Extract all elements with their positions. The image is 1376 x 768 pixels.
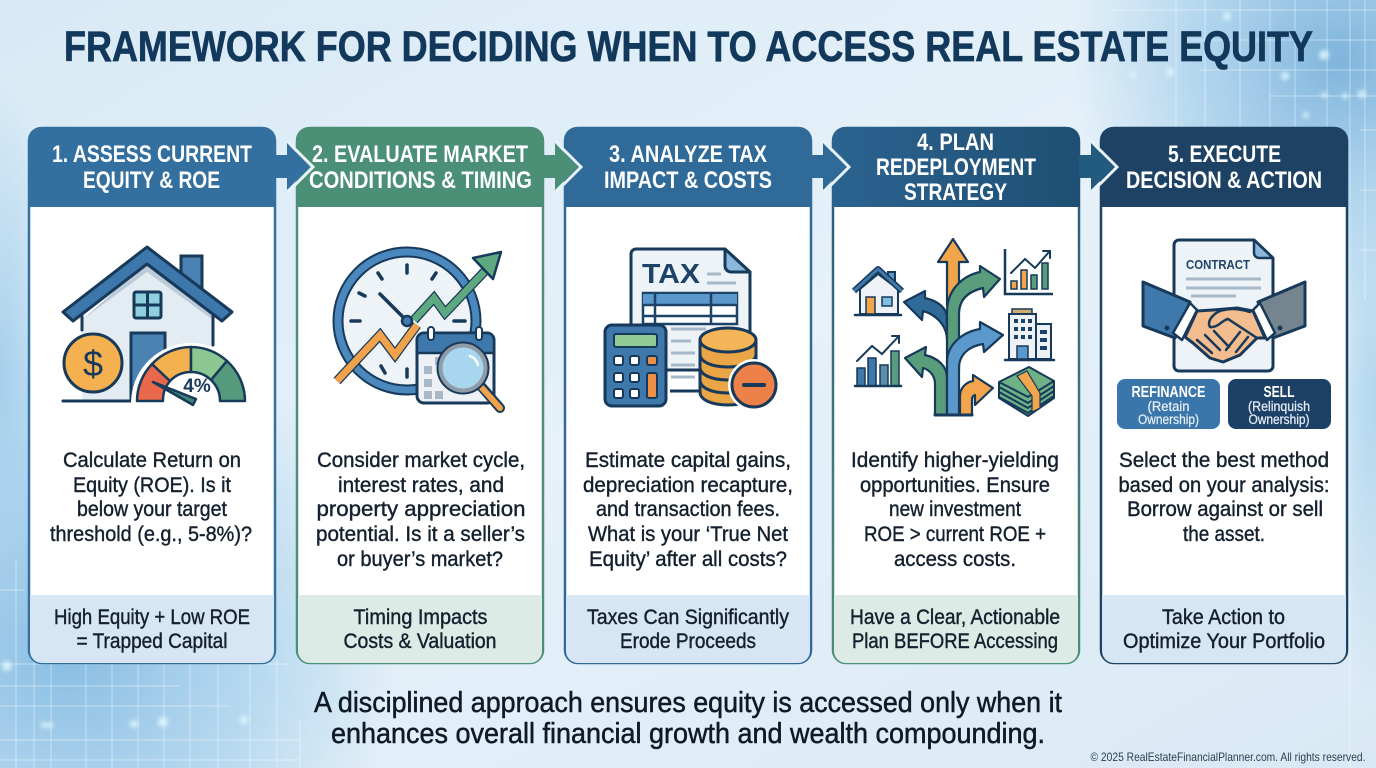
callout: step 5 takeaway: Optimize Your Portfolio (1123, 630, 1325, 653)
text: step 5 description (1118, 448, 1330, 546)
button: refinance: REFINANCE (1132, 384, 1206, 401)
heading: step 5 (1126, 141, 1322, 194)
text: step 5 description: based on your analysis: (1118, 473, 1330, 497)
icon: tax form, calculator, coins: TAX (642, 258, 700, 289)
callout: step 1 takeaway: High Equity + Low ROE (54, 606, 250, 629)
button: sell: SELL (1264, 384, 1294, 401)
heading: step 4: 4. PLAN (917, 129, 994, 156)
arrow: step 1 to 2 (275, 141, 313, 193)
text: step 3 description (583, 448, 793, 571)
text: step 1 description: threshold (e.g., 5-8%)? (50, 522, 252, 546)
text: step 4 description: Identify higher-yielding (851, 448, 1059, 472)
callout: step 3 takeaway: Erode Proceeds (620, 630, 756, 653)
button: refinance: Ownership) (1138, 412, 1199, 427)
callout: step 4 takeaway (850, 606, 1060, 653)
mini cash stack (999, 367, 1054, 416)
text: step 2 description (316, 448, 526, 571)
text: step 4 description: ROE > current ROE + (864, 522, 1046, 546)
step 5 header bar (1100, 127, 1348, 207)
callout: step 2 takeaway (344, 606, 496, 653)
callout: step 3 takeaway: Taxes Can Significantly (587, 606, 789, 629)
icon: house with dollar and ROE gauge: 4% (183, 376, 211, 397)
text: step 4 description: access costs. (894, 547, 1016, 571)
text: step 1 description: Equity (ROE). Is it (73, 473, 231, 497)
icon: tax form, calculator, coins (605, 249, 780, 411)
icon: contract and handshake (1143, 240, 1305, 371)
icon: branching redeployment arrows (854, 239, 1054, 416)
callout: step 2 takeaway: Costs & Valuation (344, 630, 496, 653)
text: step 2 description: Consider market cycle, (317, 448, 525, 472)
heading: step 1: 1. ASSESS CURRENT (52, 141, 252, 168)
panel: step 3 tax (564, 127, 812, 663)
mini bar chart left (855, 336, 901, 386)
conclusion statement (314, 687, 1062, 750)
callout: step 3 takeaway (587, 606, 789, 653)
step 1 header bar (28, 127, 276, 207)
text: step 4 description (851, 448, 1059, 571)
conclusion statement: enhances overall financial growth and wealth compounding. (331, 718, 1045, 750)
mini house (854, 269, 902, 315)
heading: step 2: 2. EVALUATE MARKET (312, 141, 528, 168)
text: step 3 description: depreciation recapture, (583, 473, 793, 497)
heading: step 2 (309, 141, 532, 194)
callout: step 4 takeaway: Have a Clear, Actionable (850, 606, 1060, 629)
text: step 1 description: Calculate Return on (63, 448, 241, 472)
heading: step 1 (52, 141, 252, 194)
mini office building (1005, 309, 1054, 360)
text: step 3 description: and transaction fees. (596, 497, 780, 521)
heading: step 4 (876, 129, 1036, 206)
button: sell: Ownership) (1248, 412, 1310, 427)
panel: step 4 redeployment (832, 127, 1080, 663)
callout: step 1 takeaway: = Trapped Capital (76, 630, 228, 653)
heading: step 4: STRATEGY (904, 179, 1007, 206)
button: sell (1228, 379, 1331, 429)
heading: step 3 (604, 141, 772, 194)
icon: house with dollar and ROE gauge: $ (83, 343, 103, 384)
callout: step 2 takeaway: Timing Impacts (354, 606, 488, 629)
text: step 1 description (50, 448, 252, 546)
callout: step 5 takeaway (1123, 606, 1325, 653)
heading: step 2: CONDITIONS & TIMING (309, 167, 532, 194)
heading: step 5: 5. EXECUTE (1168, 141, 1281, 168)
text: step 4 description: opportunities. Ensure (860, 473, 1050, 497)
step 5 callout band (1102, 595, 1346, 663)
step 4 callout band (834, 595, 1078, 663)
text: step 2 description: interest rates, and (338, 473, 504, 497)
callout: step 4 takeaway: Plan BEFORE Accessing (852, 630, 1058, 653)
step 2 header bar (296, 127, 544, 207)
button: refinance: (Retain (1148, 399, 1190, 414)
arrow: step 4 to 5 (1079, 141, 1117, 193)
button: sell: (Relinquish (1248, 399, 1310, 414)
panel: step 5 execute (1100, 127, 1348, 663)
text: step 1 description: below your target (77, 497, 227, 521)
heading: step 3: IMPACT & COSTS (604, 167, 772, 194)
icon: clock with market trend and calendar (337, 252, 501, 408)
text: step 3 description: Equity’ after all costs? (589, 547, 787, 571)
callout: step 1 takeaway (54, 606, 250, 653)
text: step 2 description: potential. Is it a seller’s (316, 522, 525, 546)
heading: step 4: REDEPLOYMENT (876, 154, 1036, 181)
icon: contract and handshake: CONTRACT (1186, 257, 1250, 272)
step 1 callout band (30, 595, 274, 663)
text: step 5 description: Borrow against or sell (1127, 497, 1323, 521)
text: step 3 description: Estimate capital gains, (585, 448, 791, 472)
step 3 callout band (566, 595, 810, 663)
icon: house with dollar and ROE gauge (63, 247, 251, 405)
mini bar chart right (1005, 249, 1053, 294)
text: step 2 description: or buyer’s market? (337, 547, 503, 571)
step 4 header bar (832, 127, 1080, 207)
arrow: step 2 to 3 (543, 141, 581, 193)
heading: step 3: 3. ANALYZE TAX (609, 141, 767, 168)
arrow: step 3 to 4 (811, 141, 849, 193)
callout: step 5 takeaway: Take Action to (1162, 606, 1285, 629)
step 2 callout band (298, 595, 542, 663)
button: refinance (1117, 379, 1220, 429)
panel: step 1 assess (28, 127, 276, 663)
step 3 header bar (564, 127, 812, 207)
heading: step 5: DECISION & ACTION (1126, 167, 1322, 194)
conclusion statement: A disciplined approach ensures equity is accessed only when it (314, 687, 1062, 719)
text: step 4 description: new investment (889, 497, 1021, 521)
text: step 3 description: What is your ‘True Net (588, 522, 788, 546)
panel: step 2 market (296, 127, 544, 663)
heading: step 1: EQUITY & ROE (83, 167, 220, 194)
text: step 5 description: Select the best method (1119, 448, 1329, 472)
text: step 2 description: property appreciation (316, 497, 526, 521)
text: step 5 description: the asset. (1183, 522, 1265, 546)
